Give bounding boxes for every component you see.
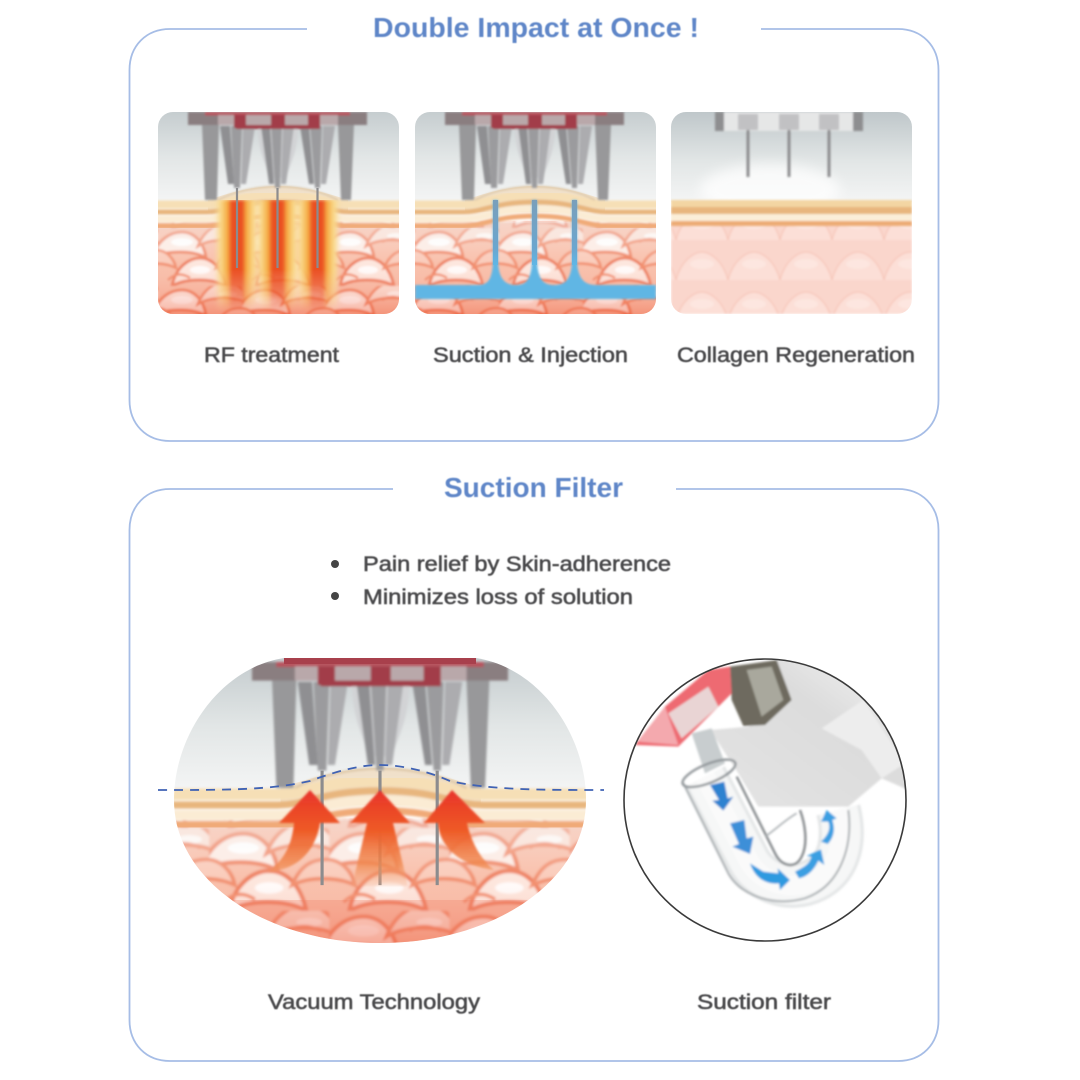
label: RF treatment: RF treatment xyxy=(204,344,339,367)
heading: double impact: Double Impact at Once ! xyxy=(373,12,699,43)
image: suction filter tube xyxy=(624,658,908,941)
bullet list xyxy=(331,553,671,609)
dashed line: skin lift xyxy=(158,765,604,790)
bullet list: Pain relief by Skin-adherence xyxy=(363,553,671,576)
image: RF treatment xyxy=(158,112,399,314)
panel: double impact xyxy=(118,12,938,441)
image: collagen regeneration xyxy=(671,112,912,314)
bullet list: Minimizes loss of solution xyxy=(363,586,633,609)
panel: suction filter xyxy=(130,472,938,1061)
label: suction and injection: Suction & Injection xyxy=(433,344,628,367)
heading: suction filter: Suction Filter xyxy=(444,472,623,503)
label: vacuum technology: Vacuum Technology xyxy=(268,991,481,1014)
label: collagen regeneration: Collagen Regeneration xyxy=(677,344,915,367)
arrows: upward suction xyxy=(268,790,494,886)
image: suction and injection xyxy=(415,112,656,314)
image: vacuum technology xyxy=(158,658,604,943)
label: suction filter: Suction filter xyxy=(697,991,831,1014)
